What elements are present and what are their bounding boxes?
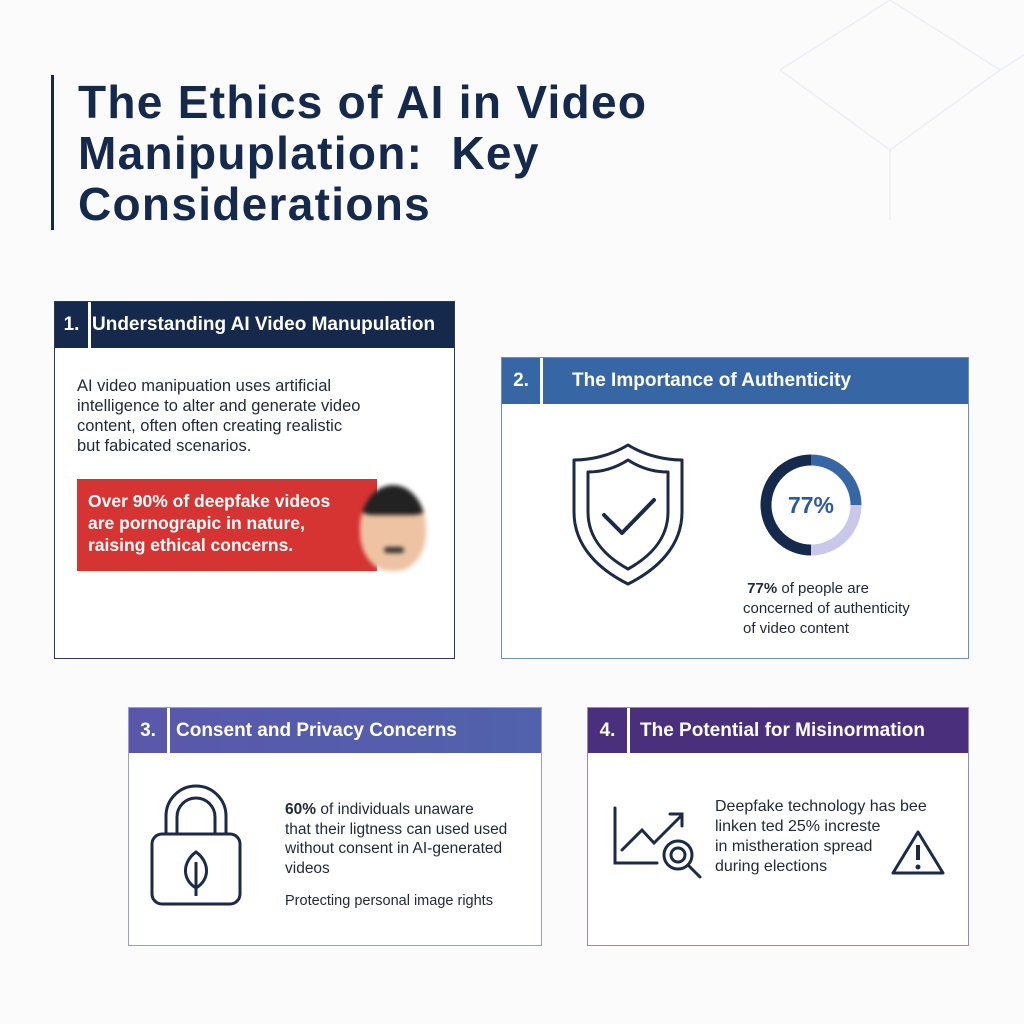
decorative background lines [780,0,1024,220]
panel 3 header: Consent and Privacy Concerns [176,720,457,740]
icon: warning triangle [892,830,945,874]
panel 1 header: Understanding AI Video Manupulation [92,314,435,335]
panel 3: Consent and Privacy Concerns [128,707,542,946]
panel 2: The Importance of Authenticity [501,357,969,659]
stat text: without consent in AI-generated [285,840,502,857]
panel 2 header [502,358,968,404]
stat text: 77% of people are [747,580,869,597]
donut chart 77%: 77% [788,492,834,518]
icon: shield with check [572,444,684,586]
stat text: 60% of individuals unaware [285,801,474,818]
panel 1 header: 1. [64,314,79,335]
panel 1 description: AI video manipuation uses artificial [77,377,331,395]
panel 2 header: 2. [513,370,529,391]
stat text: Deepfake technology has bee [715,798,927,815]
panel 1: Understanding AI Video Manupulation [54,301,455,659]
red callout [77,479,377,571]
title [78,76,647,230]
panel 3 header: 3. [140,720,156,740]
stat text [715,798,927,875]
title: The Ethics of AI in Video [78,76,647,128]
stat text: in mistheration spread [715,838,872,855]
panel 1 description: content, often often creating realistic [77,417,342,435]
panel 4 header: 4. [600,720,615,740]
icon: blurred face [360,485,426,571]
stat text: linken ted 25% increste [715,818,880,835]
title accent bar [51,75,54,230]
panel 4 header [588,708,968,753]
stat text: videos [285,860,330,876]
stat text [285,801,507,876]
panel 1 description: but fabicated scenarios. [77,437,251,455]
icon: chart with magnifier [614,806,702,879]
red callout: raising ethical concerns. [88,535,293,555]
panel 4 header: The Potential for Misinormation [640,720,925,740]
stat text: concerned of authenticity [743,600,910,617]
stat text: during elections [715,858,827,875]
title: Considerations [78,178,431,230]
donut chart 77% [760,454,862,556]
panel 1 description: intelligence to alter and generate video [77,397,360,415]
icon: padlock with leaf [150,784,242,906]
stat text: that their ligtness can used used [285,820,507,838]
subtext: Protecting personal image rights [285,893,493,909]
panel 3 header [129,708,541,753]
title: Manipupl​ation: Key [78,127,540,179]
stat text: of video content [743,620,849,637]
panel 1 description [77,377,360,455]
panel 2 header: The Importance of Authenticity [572,370,851,391]
red callout: Over 90% of deepfake videos [88,491,330,511]
panel 1 header [55,302,454,348]
stat text [743,580,910,637]
panel 4: The Potential for Misinormation [587,707,969,946]
red callout: are pornograpic in nature, [88,513,305,533]
